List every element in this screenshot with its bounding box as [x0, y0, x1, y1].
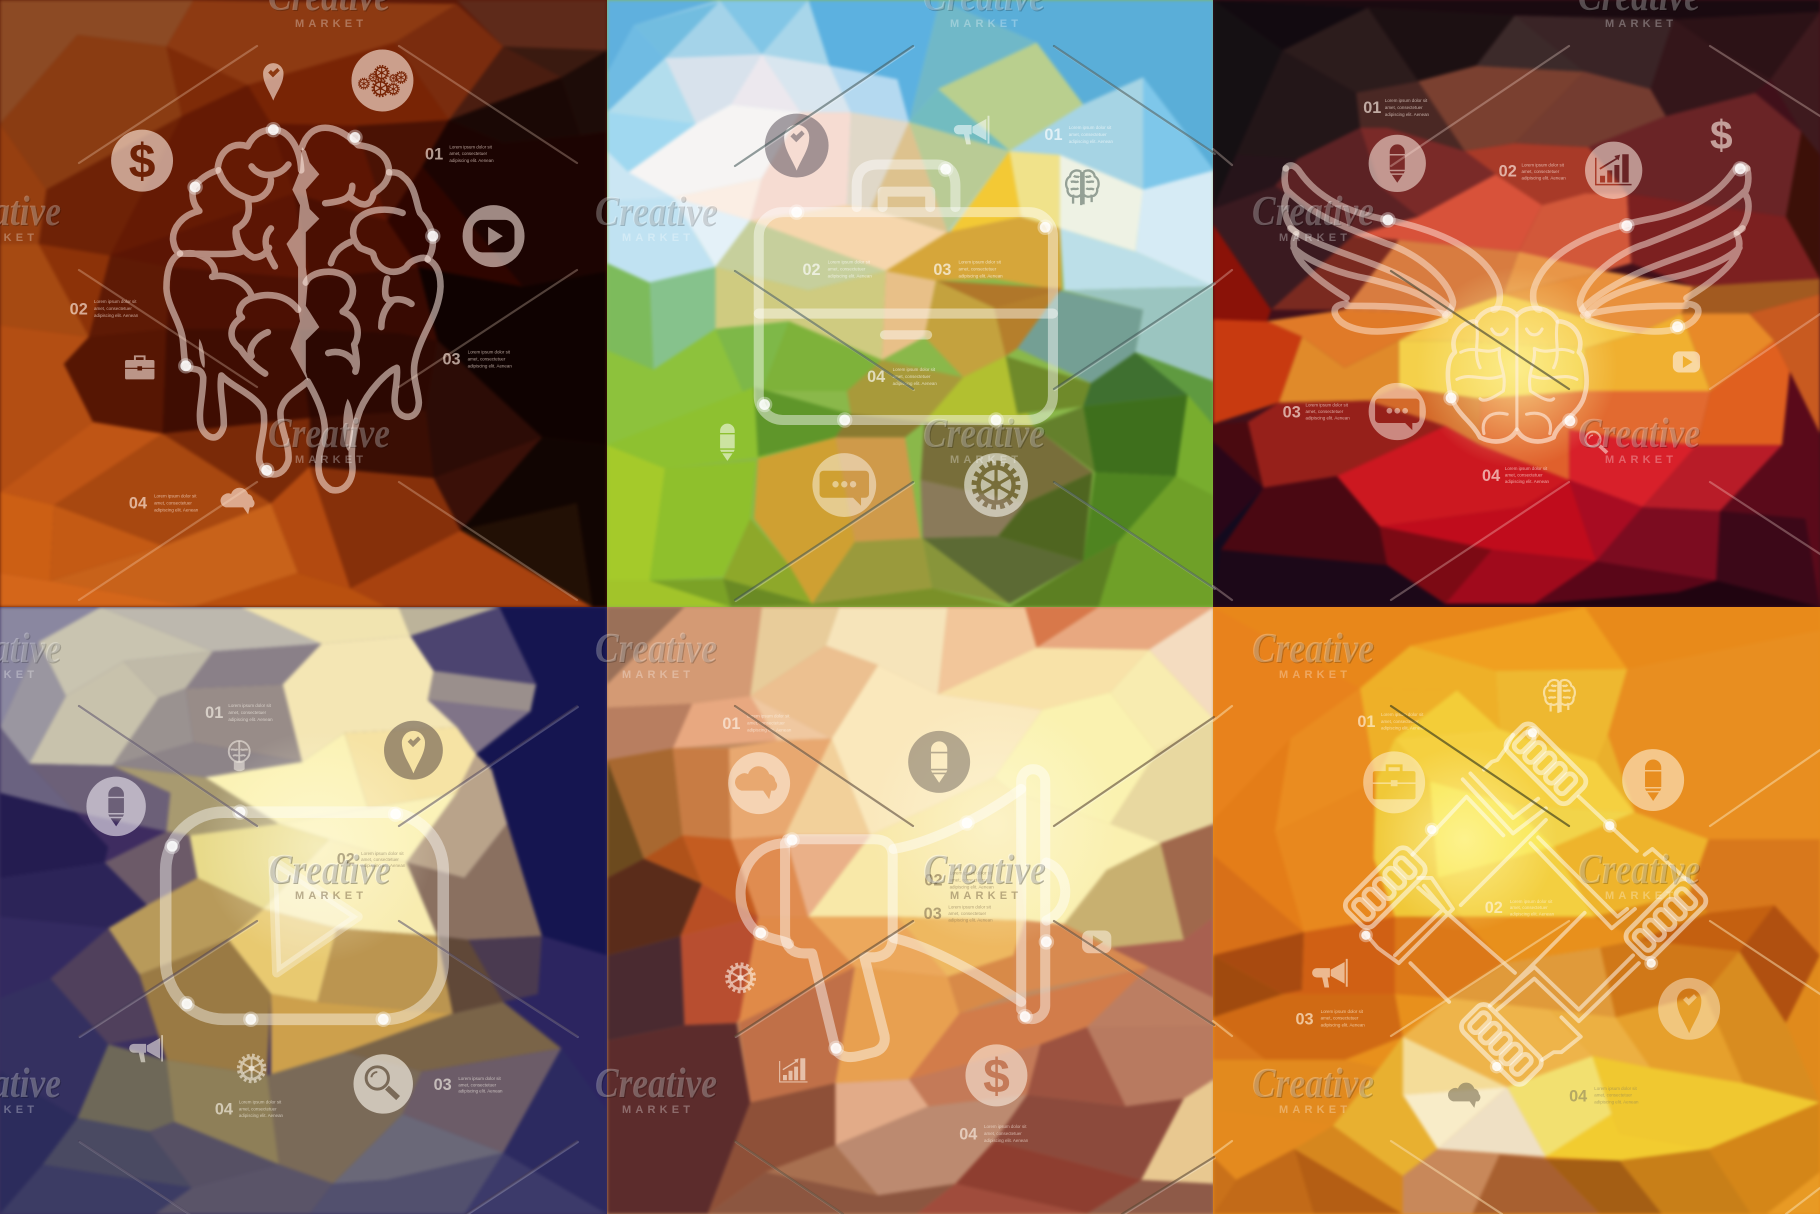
- background: dark orange polygons: [0, 0, 607, 607]
- icon: brain light bulb: [229, 741, 250, 771]
- text block 02: [1499, 162, 1566, 181]
- brain between wings: [1448, 308, 1587, 441]
- text block 03: Lorem ipsum dolor sit: [1321, 1009, 1364, 1014]
- watermark: third row: MARKET: [1605, 890, 1673, 902]
- text block 02: adipiscing elit. Aenean: [361, 863, 406, 868]
- panel: briefcase on blue and green: [607, 0, 1214, 607]
- icon: magnifier in circle: [354, 1054, 413, 1114]
- watermark: top row: MARKET: [295, 18, 363, 30]
- text block 01: Lorem ipsum dolor sit: [1069, 125, 1112, 130]
- icon: briefcase in circle: [1363, 751, 1425, 813]
- text block 01: 01: [1363, 99, 1381, 117]
- text block 03: 03: [933, 261, 951, 279]
- watermark: bottom offset row: Creative: [595, 1061, 717, 1107]
- text block 03: amet, consectetuer: [468, 356, 506, 361]
- text block 03: Lorem ipsum dolor sit: [948, 905, 992, 910]
- watermark: lower offset row: Creative: [595, 626, 717, 672]
- watermark: third row: Creative: [1578, 847, 1700, 893]
- icon: megaphone: [954, 116, 989, 144]
- text block 04: 04: [1569, 1088, 1587, 1106]
- panel: brain on dark orange: [0, 0, 607, 607]
- text block 02: Lorem ipsum dolor sit: [1510, 899, 1553, 904]
- text block 01: amet, consectetuer: [747, 721, 785, 726]
- text block 03: Lorem ipsum dolor sit: [458, 1076, 502, 1081]
- watermark: second row: Creative: [1579, 412, 1701, 458]
- icon: chat bubble in circle: [1369, 383, 1426, 440]
- icon: chat bubble in circle: [812, 453, 876, 517]
- icon: map pin in circle: [765, 114, 829, 177]
- text block 02: 02: [1485, 899, 1503, 917]
- text block 04: 04: [215, 1101, 233, 1119]
- text block 03: amet, consectetuer: [458, 1082, 497, 1087]
- wing and brain connection nodes: [1383, 163, 1746, 426]
- megaphone outline: [741, 769, 1065, 1057]
- text block 01: [722, 714, 792, 733]
- text block 04: amet, consectetuer: [1594, 1093, 1633, 1098]
- handshake diamond outline: [1342, 720, 1709, 1088]
- text block 02: 02: [924, 872, 943, 890]
- watermark: upper offset row: Creative: [1252, 189, 1374, 235]
- text block 01: amet, consectetuer: [449, 151, 488, 156]
- watermark: bottom offset row: MARKET: [622, 1104, 690, 1116]
- text block 01: amet, consectetuer: [1069, 132, 1107, 137]
- watermark: upper offset row: Creative: [596, 190, 718, 236]
- text block 04: amet, consectetuer: [893, 374, 931, 379]
- text block 03: 03: [442, 351, 461, 369]
- text block 01: [205, 703, 273, 722]
- text block 04: adipiscing elit. Aenean: [239, 1113, 284, 1118]
- panel: handshake on orange and yellow: [1213, 607, 1820, 1214]
- text block 04: Lorem ipsum dolor sit: [154, 493, 197, 498]
- text block 02: 02: [337, 850, 355, 868]
- text block 04: [1569, 1086, 1639, 1106]
- text block 04: 04: [129, 495, 147, 513]
- text block 04: amet, consectetuer: [984, 1131, 1022, 1136]
- text block 02: adipiscing elit. Aenean: [1510, 912, 1555, 917]
- text block 02: Lorem ipsum dolor sit: [361, 851, 404, 856]
- text block 04: Lorem ipsum dolor sit: [1594, 1086, 1637, 1091]
- text block 03: adipiscing elit. Aenean: [458, 1088, 503, 1093]
- text block 04: adipiscing elit. Aenean: [984, 1138, 1029, 1143]
- icon: pencil: [720, 424, 735, 461]
- watermark: bottom offset row: Creative: [1253, 1062, 1375, 1108]
- text block 04: [129, 493, 199, 513]
- text block 03: Lorem ipsum dolor sit: [1306, 402, 1349, 407]
- icon: speech cloud in circle: [728, 752, 790, 814]
- text block 04: Lorem ipsum dolor sit: [239, 1100, 282, 1105]
- text block 01: adipiscing elit. Aenean: [449, 158, 494, 163]
- watermark: lower offset row: MARKET: [1279, 669, 1347, 681]
- text block 01: 01: [425, 145, 443, 163]
- text block 02: amet, consectetuer: [1510, 905, 1548, 910]
- text block 02: 02: [70, 300, 88, 318]
- text block 02: amet, consectetuer: [1522, 169, 1560, 174]
- watermark: second row: MARKET: [295, 454, 363, 466]
- icon: briefcase: [125, 355, 154, 379]
- briefcase connection nodes: [759, 164, 1051, 425]
- text block 04: [867, 367, 937, 386]
- text block 04: [215, 1100, 284, 1119]
- watermark: second row: [268, 411, 1701, 466]
- text block 02: amet, consectetuer: [950, 877, 988, 882]
- text block 01: adipiscing elit. Aenean: [1069, 139, 1114, 144]
- text block 03: [924, 905, 993, 923]
- text block 01: 01: [722, 715, 740, 733]
- text block 01: 01: [205, 704, 223, 722]
- icon: speech cloud: [1448, 1083, 1480, 1108]
- watermark: bottom offset row: Creative: [596, 1062, 718, 1108]
- text block 01: adipiscing elit. Aenean: [228, 717, 273, 722]
- icon: brain with drips: [1544, 680, 1575, 713]
- text block 03: Lorem ipsum dolor sit: [958, 260, 1002, 265]
- background: peach and brown polygons: [607, 607, 1214, 1214]
- panel: megaphone on peach and brown: [607, 607, 1214, 1214]
- watermark: bottom offset row: MARKET: [1279, 1104, 1347, 1116]
- text block 03: [442, 349, 512, 369]
- icon: map pin in circle: [1658, 978, 1720, 1040]
- watermark: lower offset row: Creative: [1253, 627, 1375, 673]
- text block 01: Lorem ipsum dolor sit: [228, 703, 272, 708]
- text block 04: Lorem ipsum dolor sit: [1505, 466, 1548, 471]
- watermark: lower offset row: Creative: [1252, 626, 1374, 672]
- watermark: upper offset row: MARKET: [1279, 232, 1347, 244]
- text block 03: amet, consectetuer: [1306, 409, 1344, 414]
- text block 04: adipiscing elit. Aenean: [1594, 1100, 1639, 1105]
- left wing: [1284, 166, 1500, 331]
- icon: bar chart in circle: [1585, 142, 1642, 199]
- text block 04: [1482, 466, 1550, 485]
- watermark: lower offset row: Creative: [596, 627, 718, 673]
- icon: pencil in circle: [1622, 749, 1684, 811]
- watermark: third row: Creative: [269, 848, 391, 894]
- text block 02: Lorem ipsum dolor sit: [828, 260, 871, 265]
- watermark: third row: MARKET: [950, 890, 1018, 902]
- text block 02: adipiscing elit. Aenean: [828, 274, 872, 279]
- frame connection nodes: [167, 807, 401, 1025]
- watermark: second row: Creative: [924, 412, 1046, 458]
- icon: map pin: [263, 63, 284, 101]
- icon: pencil in circle: [86, 777, 146, 836]
- icon: video play in circle: [463, 205, 525, 267]
- text block 03: amet, consectetuer: [958, 267, 997, 272]
- text block 02: Lorem ipsum dolor sit: [950, 870, 993, 875]
- icon: dollar sign: $: [1710, 112, 1733, 158]
- text block 01: 01: [1044, 126, 1063, 144]
- text block 04: adipiscing elit. Aenean: [1505, 479, 1550, 484]
- watermark: upper offset row: Creative: [1253, 190, 1375, 236]
- icon: dollar in circle: [111, 130, 173, 192]
- text block 01: 01: [1357, 713, 1375, 731]
- text block 01: Lorem ipsum dolor sit: [1381, 712, 1424, 717]
- watermark: third row: [268, 847, 1701, 902]
- text block 02: adipiscing elit. Aenean: [94, 313, 139, 318]
- icon: video play: [1082, 930, 1111, 953]
- text block 01: [1044, 125, 1114, 144]
- text block 01: amet, consectetuer: [228, 710, 267, 715]
- text block 02: 02: [1499, 163, 1517, 181]
- handshake connection nodes: [1361, 728, 1656, 1071]
- text block 04: amet, consectetuer: [154, 500, 192, 505]
- text block 02: [70, 299, 139, 318]
- text block 04: 04: [1482, 467, 1500, 485]
- icon: map pin in circle: [384, 721, 443, 780]
- text block 03: adipiscing elit. Aenean: [468, 363, 512, 368]
- watermark: upper offset row: MARKET: [622, 232, 690, 244]
- text block 01: [425, 144, 494, 163]
- text block 02: [924, 870, 994, 890]
- text block 04: amet, consectetuer: [239, 1106, 277, 1111]
- text block 04: [959, 1124, 1029, 1143]
- text block 03: 03: [1283, 404, 1301, 422]
- background: orange and yellow polygons: [1213, 607, 1820, 1214]
- watermark: second row: Creative: [923, 411, 1045, 457]
- text block 03: [1295, 1009, 1365, 1028]
- watermark: second row: Creative: [1578, 411, 1700, 457]
- watermark: bottom offset row: Creative: [1252, 1061, 1374, 1107]
- video frame outline with play triangle: [166, 812, 443, 1019]
- icon: gear: [727, 964, 754, 992]
- text block 03: [434, 1076, 503, 1094]
- background: blue and green polygons: [607, 0, 1214, 607]
- text block 02: [337, 850, 406, 868]
- text block 01: Lorem ipsum dolor sit: [747, 714, 790, 719]
- watermark: third row: Creative: [1579, 848, 1701, 894]
- text block 01: amet, consectetuer: [1381, 719, 1419, 724]
- watermark: upper offset row: Creative: [595, 189, 717, 235]
- text block 03: adipiscing elit. Aenean: [948, 918, 993, 923]
- icon: pencil in circle: [1369, 135, 1426, 192]
- text block 02: 02: [802, 261, 821, 279]
- right wing: [1533, 166, 1749, 331]
- briefcase outline: [759, 165, 1053, 420]
- text block 04: adipiscing elit. Aenean: [154, 507, 199, 512]
- watermark: top row: MARKET: [1605, 18, 1673, 30]
- icon: pencil in circle: [908, 731, 970, 793]
- text block 04: amet, consectetuer: [1505, 473, 1543, 478]
- icon: gear: [238, 1055, 265, 1082]
- icon: megaphone: [1312, 959, 1348, 988]
- brain outline with drips: [166, 128, 441, 490]
- watermark: top row: [268, 0, 1701, 30]
- text block 02: adipiscing elit. Aenean: [950, 884, 994, 889]
- text block 04: Lorem ipsum dolor sit: [984, 1124, 1027, 1129]
- text block 02: amet, consectetuer: [94, 306, 132, 311]
- text block 01: Lorem ipsum dolor sit: [1385, 98, 1428, 103]
- watermark: upper offset row: [0, 189, 1375, 244]
- text block 03: adipiscing elit. Aenean: [958, 274, 1003, 279]
- icon: video play: [1673, 351, 1700, 373]
- text block 02: Lorem ipsum dolor sit: [94, 299, 137, 304]
- text block 01: adipiscing elit. Aenean: [1385, 112, 1430, 117]
- text block 03: amet, consectetuer: [948, 911, 987, 916]
- text block 02: adipiscing elit. Aenean: [1522, 176, 1566, 181]
- text block 01: adipiscing elit. Aenean: [747, 728, 792, 733]
- text block 02: amet, consectetuer: [828, 267, 866, 272]
- text block 02: Lorem ipsum dolor sit: [1522, 162, 1565, 167]
- watermark: second row: MARKET: [1605, 454, 1673, 466]
- panel: winged brain on dark red: [1213, 0, 1820, 607]
- icon: megaphone: [129, 1035, 163, 1062]
- text block 03: Lorem ipsum dolor sit: [468, 349, 511, 354]
- watermark: third row: Creative: [268, 847, 390, 893]
- text block 03: [1283, 402, 1350, 422]
- background: navy and cream polygons: [0, 607, 607, 1214]
- icon: dollar in circle: [965, 1044, 1027, 1106]
- icon: gear in circle: [964, 453, 1028, 517]
- text block 01: [1357, 712, 1426, 731]
- icon: gears in circle: [351, 50, 413, 111]
- watermark: lower offset row: MARKET: [622, 669, 690, 681]
- watermark: lower offset row: [0, 626, 1375, 681]
- text block 03: 03: [434, 1076, 452, 1094]
- watermark: second row: MARKET: [950, 454, 1018, 466]
- text block 04: 04: [867, 368, 885, 386]
- text block 04: 04: [959, 1125, 977, 1143]
- text block 04: Lorem ipsum dolor sit: [893, 367, 936, 372]
- text block 03: amet, consectetuer: [1321, 1016, 1359, 1021]
- four cuff links: [1342, 720, 1709, 1088]
- watermark: third row: MARKET: [295, 890, 363, 902]
- text block 03: 03: [1295, 1010, 1314, 1028]
- watermark: second row: Creative: [269, 412, 391, 458]
- brain connection nodes: [180, 124, 438, 476]
- text block 03: adipiscing elit. Aenean: [1306, 416, 1350, 421]
- text block 03: 03: [924, 905, 942, 923]
- text block 02: [1485, 899, 1555, 917]
- watermark: second row: Creative: [268, 411, 390, 457]
- panel: video frame on navy and cream: [0, 607, 607, 1214]
- watermark: third row: Creative: [924, 848, 1046, 894]
- text block 03: [933, 260, 1003, 279]
- background: dark red and orange polygons: [1213, 0, 1820, 607]
- text block 01: amet, consectetuer: [1385, 105, 1423, 110]
- icon: speech cloud: [221, 488, 255, 514]
- text block 01: adipiscing elit. Aenean: [1381, 726, 1426, 731]
- watermark: third row: Creative: [923, 847, 1045, 893]
- text block 02: [802, 260, 872, 279]
- text block 01: [1363, 98, 1430, 117]
- text block 02: amet, consectetuer: [361, 857, 399, 862]
- megaphone connection nodes: [755, 818, 1052, 1054]
- icon: bar chart: [779, 1058, 808, 1082]
- text block 01: Lorem ipsum dolor sit: [449, 144, 493, 149]
- watermark: top row: MARKET: [950, 18, 1018, 30]
- icon: brain with drips: [1066, 170, 1099, 205]
- text block 04: adipiscing elit. Aenean: [893, 381, 937, 386]
- watermark: bottom offset row: [0, 1061, 1375, 1116]
- icon: magnifier: [1585, 432, 1607, 453]
- text block 03: adipiscing elit. Aenean: [1321, 1023, 1365, 1028]
